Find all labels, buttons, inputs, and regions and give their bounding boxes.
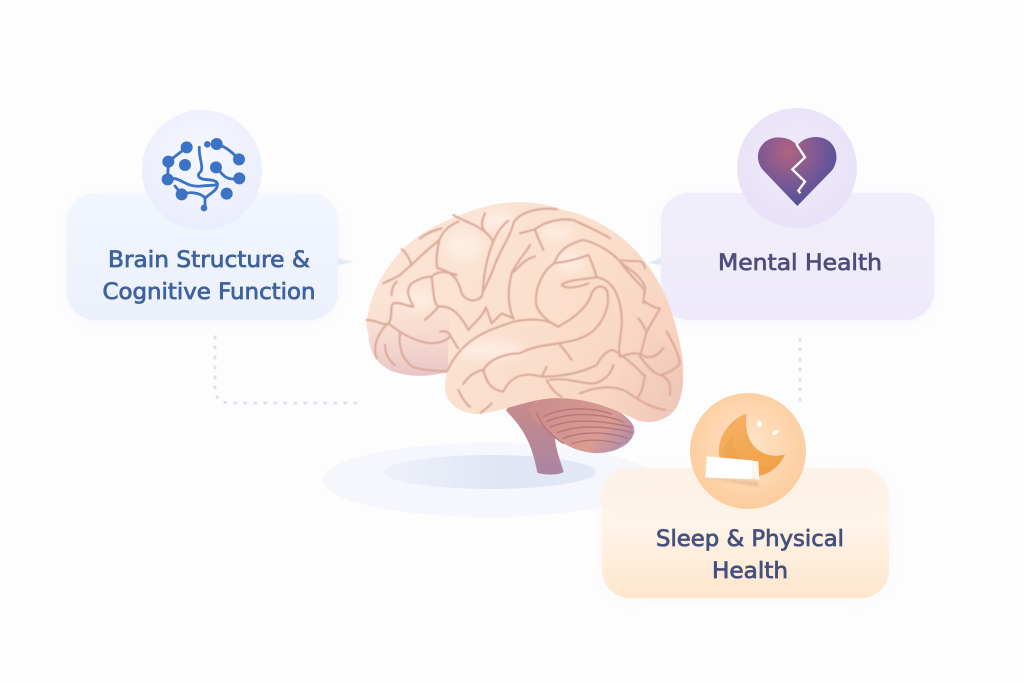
icon: neural network circle (142, 110, 262, 230)
heading: mental health: Mental Health (718, 251, 882, 276)
heading: sleep and physical health: Sleep & Physical (656, 527, 844, 552)
cerebrum upper (367, 202, 683, 422)
panel: mental health (648, 108, 934, 320)
sulci (367, 209, 680, 413)
panel: brain structure and cognitive function (67, 110, 353, 320)
pointer: right card (648, 258, 661, 265)
gyrus highlights (400, 212, 585, 359)
panel: sleep and physical health (602, 393, 889, 598)
pointer: left card (338, 258, 353, 265)
icon: moon and pillow circle (690, 393, 806, 509)
icon: broken heart circle (737, 108, 857, 228)
ground shadow under brain (322, 443, 654, 517)
connector: dotted line from cognitive card to brain (215, 337, 362, 403)
heading: sleep and physical health: Health (712, 559, 788, 584)
illustration: brain (367, 202, 683, 475)
cerebellum (528, 394, 634, 453)
connector: dotted line from mental health card to sleep card (798, 339, 802, 405)
heading: brain structure (102, 248, 316, 305)
heading: sleep and physical health (656, 527, 844, 584)
temporal lobe (445, 283, 683, 422)
heading: brain structure: Brain Structure & (108, 248, 310, 273)
brain stem (506, 390, 583, 475)
heading: brain structure: Cognitive Function (102, 280, 316, 305)
